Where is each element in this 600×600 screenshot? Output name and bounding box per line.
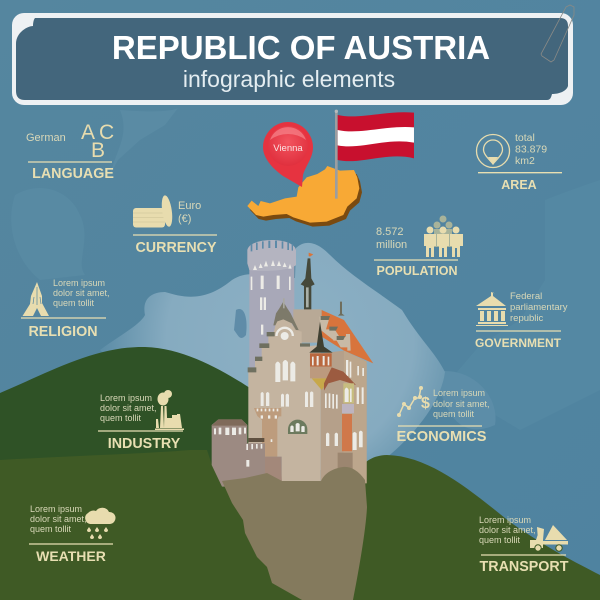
castle: [212, 240, 373, 487]
economics: [396, 386, 490, 445]
currency: Euro: [178, 200, 201, 212]
subtitle: infographic elements: [183, 66, 395, 92]
tower: [247, 240, 296, 373]
facade windows: [261, 360, 364, 450]
weather: Lorem ipsum: [30, 504, 82, 514]
title: REPUBLIC OF AUSTRIA: [112, 29, 490, 66]
area: [476, 132, 562, 192]
icon: factory: [155, 390, 184, 430]
transport: quem tollit: [479, 535, 521, 545]
icon: chart and dollar: $: [421, 395, 430, 412]
transport: Lorem ipsum: [479, 515, 531, 525]
currency: [133, 195, 217, 256]
icon: rain cloud: [85, 508, 116, 539]
back wall: [293, 309, 322, 343]
area: 83.879: [515, 144, 547, 156]
language: German: [26, 132, 66, 144]
corner turret: [309, 322, 356, 451]
weather: [29, 504, 116, 564]
industry: Lorem ipsum: [100, 393, 152, 403]
icon: coins: [133, 195, 174, 228]
industry: dolor sit amet,: [100, 403, 157, 413]
industry: quem tollit: [100, 413, 142, 423]
flag: [335, 110, 414, 199]
pin: Vienna: Vienna: [273, 143, 303, 154]
icon: letters: [81, 121, 114, 162]
icon: letters: C: [99, 121, 114, 144]
government: GOVERNMENT: [475, 336, 562, 350]
economics: quem tollit: [433, 409, 475, 419]
religion: dolor sit amet,: [53, 288, 110, 298]
economics: dolor sit amet,: [433, 399, 490, 409]
weather: quem tollit: [30, 524, 72, 534]
rose window: [275, 327, 294, 340]
economics: ECONOMICS: [396, 429, 487, 445]
Austria map: [247, 166, 362, 227]
government: parliamentary: [510, 302, 568, 313]
industry: [98, 390, 184, 452]
transport: [479, 515, 569, 575]
language: [26, 121, 114, 182]
transport: TRANSPORT: [480, 559, 569, 575]
rock under the castle: [222, 467, 367, 600]
area: km2: [515, 155, 535, 167]
population: POPULATION: [376, 264, 458, 278]
right wing: [321, 351, 367, 483]
icon: people: [424, 216, 463, 257]
currency: CURRENCY: [135, 240, 217, 256]
header panel: [12, 5, 574, 105]
government: [475, 291, 568, 350]
icon: letters: B: [91, 139, 105, 162]
low left building: [212, 419, 353, 487]
language: LANGUAGE: [32, 166, 114, 182]
clip: [541, 5, 574, 62]
background map: Europe: [11, 108, 600, 470]
government: Federal: [510, 291, 542, 302]
economics: Lorem ipsum: [433, 388, 485, 398]
stepped gable edge: [319, 317, 351, 351]
icon: truck: [530, 525, 568, 551]
area: AREA: [501, 178, 537, 192]
front hills: [0, 450, 600, 600]
weather: WEATHER: [36, 548, 106, 564]
government: republic: [510, 313, 544, 324]
population: 8.572: [376, 226, 404, 238]
area: total: [515, 132, 535, 144]
currency: (€): [178, 213, 191, 225]
small front tower: [254, 408, 281, 458]
icon: letters: A: [81, 121, 95, 144]
industry: INDUSTRY: [108, 436, 181, 452]
religion: RELIGION: [28, 324, 98, 340]
religion: quem tollit: [53, 298, 95, 308]
icon: location pin in circle: [476, 134, 510, 168]
pin: Vienna: [263, 122, 313, 187]
main facade: [248, 308, 321, 482]
icon: building: [476, 292, 508, 326]
back hill: [0, 347, 250, 480]
orange roof: [322, 310, 373, 363]
weather: dolor sit amet,: [30, 514, 87, 524]
icon: praying hands: [22, 282, 49, 316]
population: [374, 216, 463, 278]
transport: dolor sit amet,: [479, 525, 536, 535]
religion: Lorem ipsum: [53, 278, 105, 288]
religion: [21, 278, 110, 340]
population: million: [376, 239, 407, 251]
arched window: [288, 420, 307, 434]
flag spire: [301, 253, 315, 331]
